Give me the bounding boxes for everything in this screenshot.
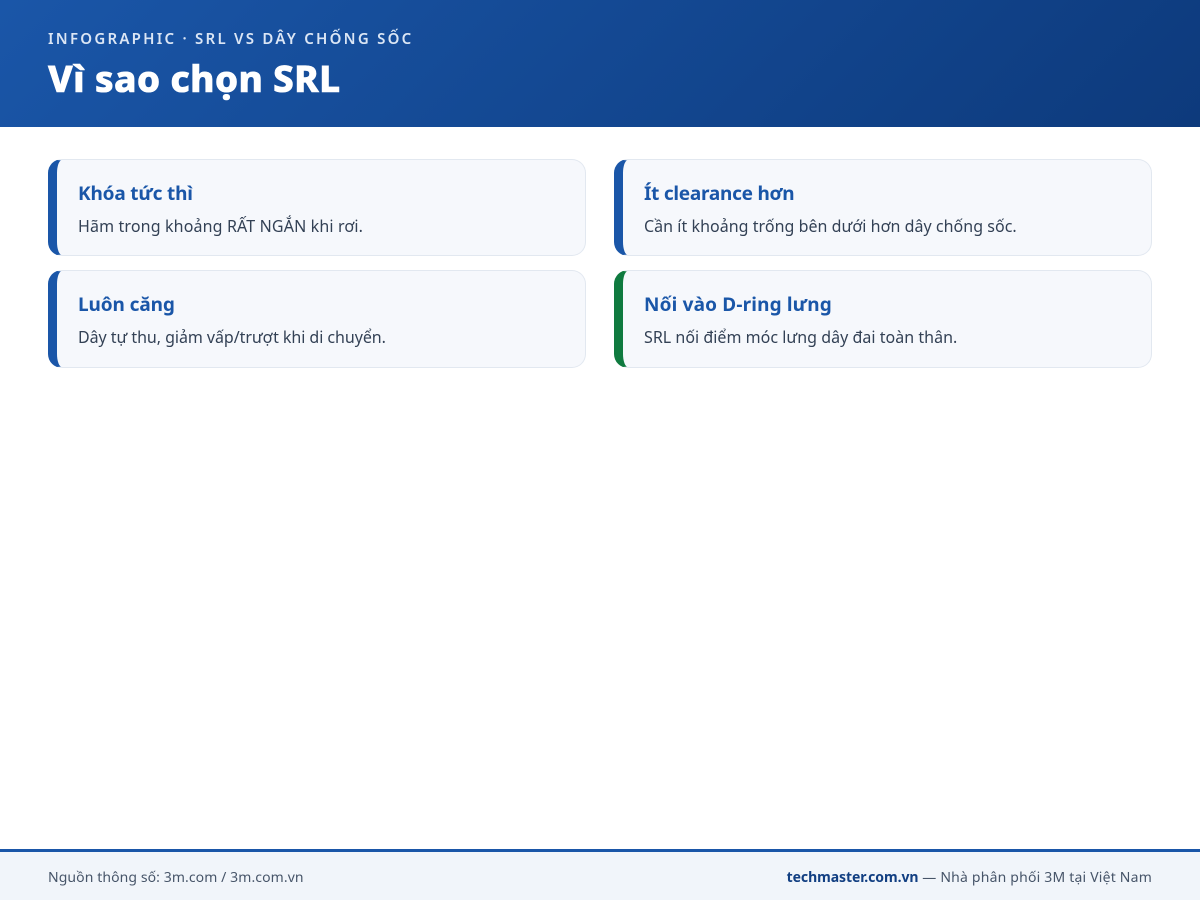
source note: Nguồn thông số: 3m.com / 3m.com.vn	[48, 868, 304, 887]
card: Ít clearance hơn	[614, 159, 1152, 256]
header banner	[0, 0, 1200, 127]
card text: SRL nối điểm móc lưng dây đai toàn thân.	[644, 326, 957, 348]
distributor credit: techmaster.com.vn — Nhà phân phối 3M tại Việt Nam	[787, 868, 1152, 887]
footer bar	[0, 849, 1200, 900]
card heading: Ít clearance hơn	[644, 180, 794, 206]
card heading: Luôn căng	[78, 291, 175, 317]
card: Nối vào D-ring lưng	[614, 270, 1152, 368]
eyebrow text: INFOGRAPHIC · SRL VS DÂY CHỐNG SỐC	[48, 29, 414, 49]
card text: Hãm trong khoảng RẤT NGẮN khi rơi.	[78, 215, 363, 237]
card heading: Khóa tức thì	[78, 180, 193, 206]
card: Luôn căng	[48, 270, 586, 368]
card heading: Nối vào D-ring lưng	[644, 291, 832, 317]
card text: Cần ít khoảng trống bên dưới hơn dây chống sốc.	[644, 215, 1017, 237]
title: Vì sao chọn SRL	[48, 52, 340, 103]
card: Khóa tức thì	[48, 159, 586, 256]
card text: Dây tự thu, giảm vấp/trượt khi di chuyển.	[78, 326, 386, 348]
